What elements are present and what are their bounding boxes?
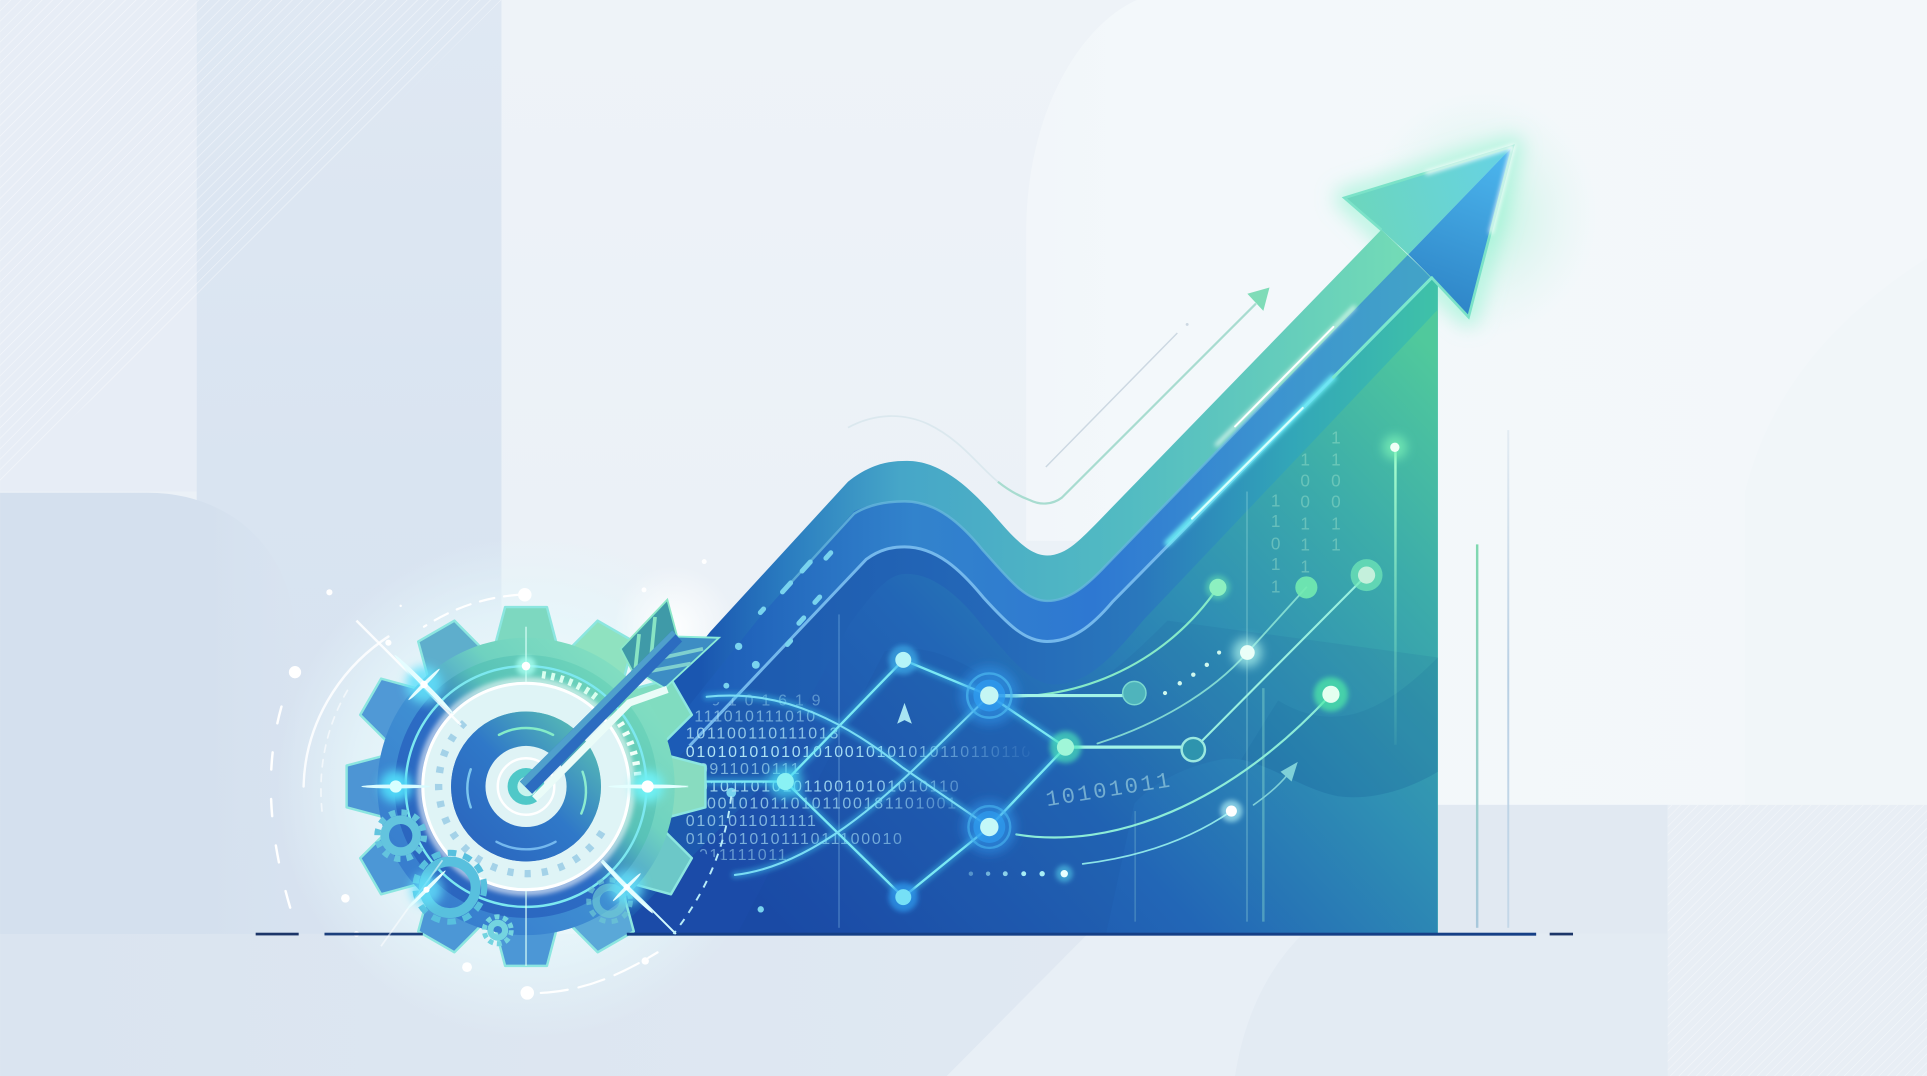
binary data field <box>686 692 1043 864</box>
node <box>1050 731 1081 763</box>
diagonal streak <box>356 621 461 725</box>
background: lower-right block <box>1438 805 1668 934</box>
background: bottom band <box>0 934 1927 1076</box>
target inner arcs <box>467 728 586 849</box>
light flares <box>356 621 731 946</box>
chart vertical light lines <box>838 450 1397 928</box>
target white ring highlight <box>423 683 629 890</box>
small green arrowhead <box>1247 288 1269 311</box>
network rising lines <box>1193 575 1367 750</box>
background: left hatched strip <box>0 0 197 492</box>
binary data field: 0101010101010100101010101101101101 <box>686 744 1043 761</box>
binary vertical columns <box>1271 428 1341 596</box>
binary vertical columns: 1 <box>1271 576 1280 596</box>
background: tall panel <box>197 0 501 934</box>
binary vertical columns: 1 <box>1300 514 1310 534</box>
flare <box>406 869 447 910</box>
binary data field: 111010111010 <box>694 708 817 725</box>
chart band C: dark blue to teal layer <box>615 278 1438 934</box>
node <box>1314 677 1348 712</box>
flare <box>516 656 536 676</box>
node <box>889 645 918 675</box>
small gear: middle <box>415 853 484 922</box>
dashed top arc <box>424 595 519 627</box>
binary vertical columns: 1 <box>1300 557 1310 577</box>
network curves to the right <box>989 587 1218 697</box>
target center <box>517 777 537 796</box>
rising dots <box>1163 650 1221 695</box>
network short lower curve <box>1083 811 1231 864</box>
dart lower feather <box>644 637 719 688</box>
orbit decorations <box>271 595 658 993</box>
gear spokes <box>366 627 688 966</box>
binary data field: 1011111011 <box>688 847 788 864</box>
small gear: lower right <box>589 880 630 922</box>
diagonal streak lower left <box>381 860 442 946</box>
binary vertical columns: 1 <box>1271 511 1280 531</box>
small curved arrow <box>1254 774 1288 805</box>
node row of dots <box>969 865 1073 882</box>
network nodes <box>768 435 1407 912</box>
baseline <box>256 933 1573 936</box>
arrow head <box>1344 146 1513 317</box>
background: hatched corner block <box>1668 805 1927 1076</box>
binary vertical columns: 1 <box>1300 450 1310 470</box>
flare <box>361 771 430 802</box>
arrow head lower half <box>1408 146 1513 317</box>
arrow tip highlight <box>1426 146 1513 233</box>
background: rounded lower-left block <box>0 493 295 934</box>
fletching glow <box>612 565 735 688</box>
target inner light disc <box>485 746 567 827</box>
glowing network connections <box>705 575 1367 897</box>
target dark disc <box>451 712 601 861</box>
gear body disc <box>377 638 675 935</box>
gear tick arcs <box>542 675 638 777</box>
node <box>962 800 1016 854</box>
gear icon with target <box>347 607 705 966</box>
node <box>1351 559 1383 591</box>
solid orbit arc <box>304 637 388 786</box>
chart lower wave overlay <box>1241 657 1438 797</box>
binary data field: 01001010110101100181101001 <box>686 796 958 813</box>
dashed outer arc <box>271 707 293 916</box>
binary vertical columns: 1 <box>1300 535 1310 555</box>
small gear: bottom <box>484 917 511 944</box>
node <box>1123 681 1146 705</box>
background: large rounded light shape <box>1026 0 1927 805</box>
binary data field: 101100110111013 <box>686 726 840 743</box>
target ring ticks <box>439 723 602 874</box>
target arrow (dart) <box>520 600 719 799</box>
binary vertical columns: 0 <box>1300 471 1310 491</box>
node <box>889 882 918 912</box>
target white ring glow <box>420 681 632 892</box>
glowing top node <box>1383 435 1407 460</box>
binary vertical columns: 1 <box>1271 554 1280 574</box>
diagonal streak lower <box>602 860 676 934</box>
faint inner arc <box>321 686 350 811</box>
target white ring <box>436 697 616 876</box>
network bright stubs <box>989 696 1193 747</box>
dart feather stripes <box>635 617 655 669</box>
binary data field: 0101011011111 <box>686 813 818 830</box>
arrow head outline <box>1344 146 1513 317</box>
dart feather lines <box>651 649 703 671</box>
arrow tip glow <box>1344 92 1598 338</box>
chart upper subtle edge line <box>787 388 1278 601</box>
network crossing curves <box>707 696 989 875</box>
target bullseye <box>508 768 544 805</box>
flare <box>599 860 654 915</box>
network glow <box>705 660 1065 897</box>
chart band A: outer teal layer <box>615 230 1438 934</box>
binary digits tilted: 10101011 <box>1044 768 1174 813</box>
small triangles in chart <box>897 703 1298 782</box>
chart light edge line <box>689 278 1432 746</box>
chart band D: main green gradient area <box>615 310 1438 934</box>
chart: layered growth area <box>615 230 1438 934</box>
node <box>960 666 1019 725</box>
background: right curved tone <box>1745 258 1927 805</box>
vertical guide lines at right <box>1476 430 1509 928</box>
binary vertical columns: 1 <box>1331 514 1341 534</box>
binary data field: 10101101010110010101010110 <box>688 778 960 795</box>
dart shaft <box>520 630 682 794</box>
binary vertical columns: 0 <box>1271 533 1280 553</box>
network faint rising curve <box>1097 587 1306 743</box>
dashed streak <box>673 796 731 934</box>
node <box>1295 576 1317 598</box>
gear teeth <box>347 607 705 966</box>
node <box>1220 800 1242 822</box>
gear dark ring <box>395 655 658 918</box>
node <box>1182 738 1205 761</box>
node <box>1206 575 1230 600</box>
binary vertical columns: 0 <box>1331 471 1341 491</box>
dart shaft highlight <box>520 630 676 786</box>
dart upper feather <box>621 600 677 672</box>
binary vertical columns: 1 <box>1271 490 1280 510</box>
network long lower curve <box>1016 694 1331 838</box>
gear thin light ring <box>406 666 646 907</box>
binary data field: 010101010111011100010 <box>686 831 904 848</box>
orbit dots <box>289 559 707 1000</box>
faint wave outline above chart <box>848 304 1256 504</box>
arrow shaft highlights <box>1167 278 1432 543</box>
target inner ring <box>498 758 554 815</box>
binary vertical columns: 1 <box>1331 428 1341 448</box>
binary data field: 10911010111 <box>688 761 801 778</box>
binary vertical columns: 1 <box>1331 450 1341 470</box>
background: hatch texture <box>0 0 501 485</box>
binary data field: 1 0 1 0 1 6 1 9 <box>694 692 822 709</box>
node <box>768 764 803 799</box>
small gear: upper left <box>377 812 424 859</box>
network diamond lines <box>705 660 1065 897</box>
node <box>1233 638 1262 667</box>
binary vertical columns: 1 <box>1331 535 1341 555</box>
binary vertical columns: 0 <box>1300 492 1310 512</box>
flare <box>393 653 455 716</box>
chart band B: blue layer <box>751 255 1438 932</box>
flare <box>608 771 687 802</box>
dashes on the chart left side <box>723 549 834 913</box>
binary vertical columns: 0 <box>1331 492 1341 512</box>
background: lighter slanted shape <box>946 934 1303 1076</box>
chart wave overlay <box>737 621 1438 934</box>
dart white outline <box>535 689 667 799</box>
background: bottom right shape <box>1235 934 1668 1076</box>
gear halo <box>277 535 780 1038</box>
arrow head upper half <box>1344 146 1513 254</box>
dashed bottom arc <box>541 952 658 993</box>
